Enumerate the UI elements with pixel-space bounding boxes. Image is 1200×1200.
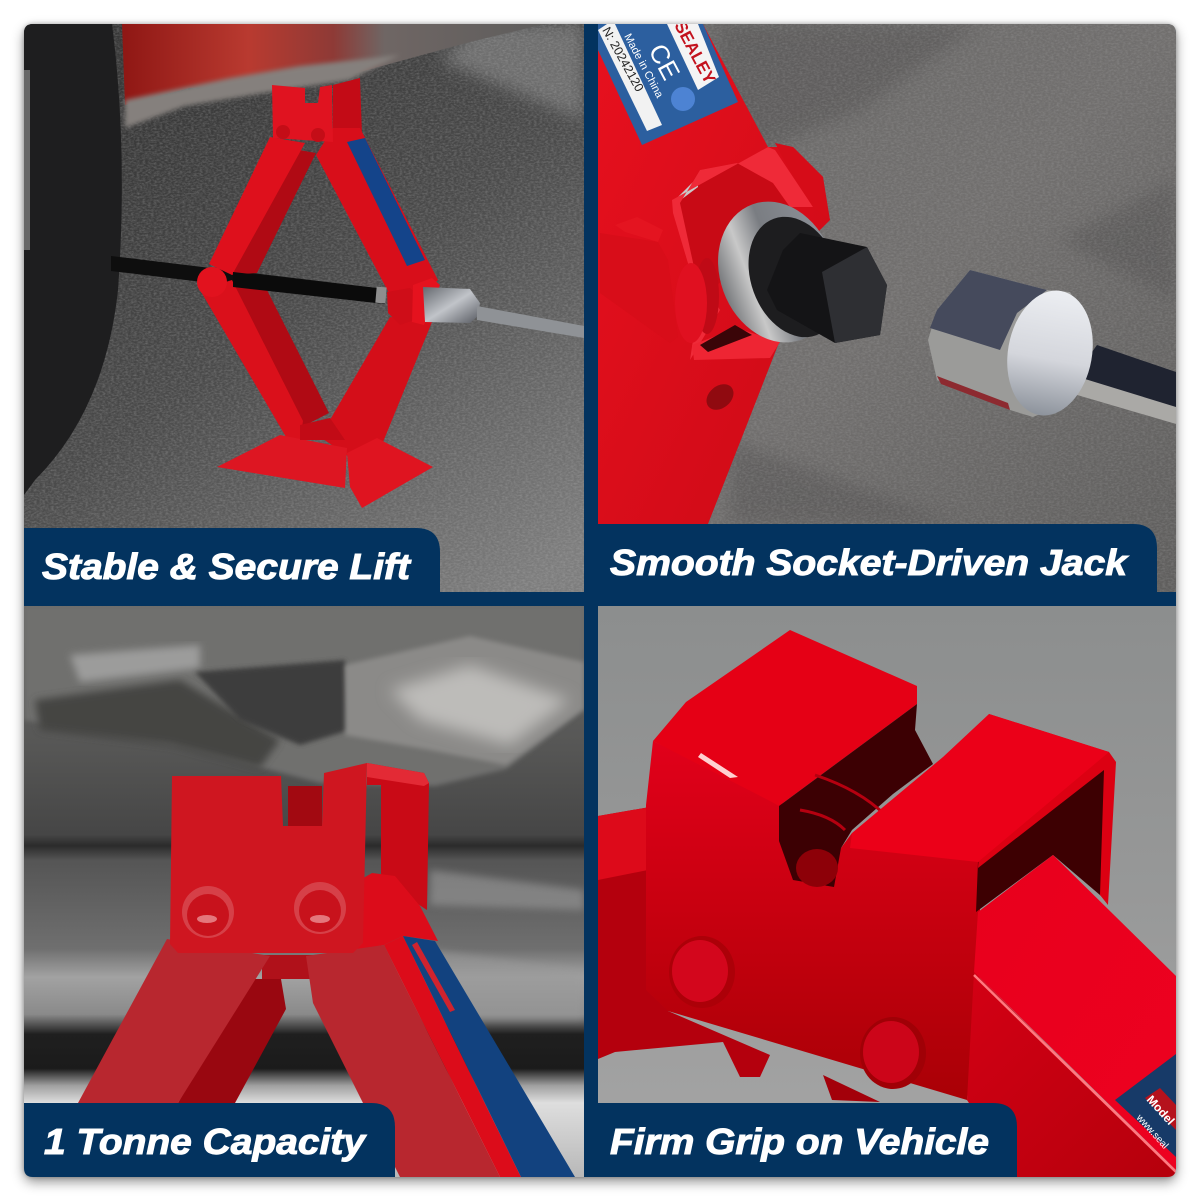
- caption tab: [584, 524, 1176, 606]
- plate lug: [615, 217, 663, 242]
- inner arm: [178, 979, 286, 1103]
- second hanging tab: [823, 1075, 880, 1102]
- socket red reflection: [937, 376, 1010, 410]
- concrete floor: [24, 24, 584, 592]
- caption text: 1 Tonne Capacity: [44, 1121, 367, 1162]
- silver slit: [678, 177, 698, 199]
- caption text: Firm Grip on Vehicle: [610, 1121, 989, 1162]
- caption: 1 tonne capacity: [24, 1103, 395, 1177]
- lower right jack arm: [320, 317, 432, 462]
- serial text: N: 20242120: [599, 25, 646, 94]
- lower lip: [692, 328, 780, 360]
- far light bands: [430, 870, 584, 1020]
- rivet cap: [672, 940, 728, 1002]
- caption text: Smooth Socket-Driven Jack: [610, 542, 1129, 583]
- saddle plate: [170, 763, 367, 953]
- tyre: [24, 24, 122, 495]
- side lug: [775, 143, 830, 220]
- chassis underside: [24, 606, 584, 786]
- right arm bright strip: [384, 936, 521, 1177]
- label url: www.seal: [1133, 1112, 1170, 1151]
- bracket strap: [672, 147, 813, 360]
- serial number strip: [598, 24, 662, 131]
- saddle highlight: [698, 753, 738, 778]
- made in china text: Made in China: [621, 32, 666, 101]
- rivet highlight: [310, 915, 330, 923]
- upper left jack arm: [209, 137, 305, 275]
- hex bolt: [767, 233, 887, 343]
- opening shadow: [700, 325, 752, 352]
- panel: stable and secure lift photo: [24, 24, 584, 592]
- left joint: [197, 267, 227, 293]
- label red band: [1145, 1088, 1176, 1130]
- right joint: [387, 288, 413, 320]
- left plate: [600, 233, 678, 343]
- rivet base: [299, 890, 341, 932]
- rivet cap: [863, 1021, 919, 1083]
- jack foot: [347, 438, 433, 508]
- lower tube side face: [967, 972, 1176, 1177]
- lower left jack arm: [200, 280, 303, 440]
- bracket inner: [678, 163, 795, 300]
- left arm: [78, 939, 270, 1103]
- rivet base: [187, 894, 229, 936]
- right rim: [978, 714, 1116, 905]
- data label: [598, 24, 738, 145]
- label corner: [1115, 1054, 1176, 1157]
- threaded screw: [111, 256, 385, 304]
- wrench rod: [1067, 345, 1176, 424]
- socket end face: [998, 284, 1102, 422]
- right saddle rivet: [311, 128, 325, 142]
- right arm upper: [355, 873, 438, 950]
- lower left inner arm: [236, 287, 329, 424]
- floor texture: [24, 24, 584, 592]
- label red strip: [412, 942, 455, 1012]
- right arm textured face: [306, 945, 500, 1177]
- label text: Model: [1144, 1093, 1177, 1128]
- CE mark: CE: [643, 39, 686, 85]
- garage background: [24, 606, 584, 1177]
- front pin: [675, 263, 707, 343]
- chassis light strip: [70, 645, 200, 682]
- slot pin: [796, 849, 838, 887]
- socket: [423, 287, 480, 323]
- right top face: [850, 714, 1109, 862]
- lower tube top face: [974, 855, 1176, 1170]
- hex bolt face: [822, 247, 887, 343]
- caption: smooth socket-driven jack: [584, 524, 1176, 606]
- caption: stable and secure lift: [24, 528, 584, 606]
- caption: firm grip on vehicle: [584, 1103, 1017, 1177]
- wrench rod: [477, 306, 584, 338]
- left slot: [779, 704, 933, 887]
- left bar top: [598, 807, 650, 880]
- front plate: [646, 741, 980, 1100]
- tube ridge highlight: [974, 975, 1176, 1172]
- car sill: [122, 24, 545, 105]
- rivet recess: [669, 936, 735, 1008]
- floor texture: [706, 24, 1176, 592]
- divider: vertical navy bar: [584, 24, 598, 1177]
- chassis dark lower left: [35, 680, 280, 768]
- panel: 1 tonne capacity photo: [24, 606, 584, 1177]
- collar: [699, 185, 855, 359]
- grey wall: [598, 606, 1176, 1177]
- saddle slot: [288, 786, 322, 826]
- collar inner ring: [732, 204, 858, 350]
- blurred floor: [703, 24, 1176, 592]
- panel: smooth socket-driven jack photo: [598, 18, 1176, 592]
- bracket top edge: [367, 763, 429, 786]
- rear bracket: [367, 763, 429, 910]
- rivet halo: [182, 886, 234, 938]
- tyre rim highlight: [24, 70, 30, 250]
- socket dark top: [930, 270, 1047, 350]
- safety icon: [671, 87, 695, 111]
- rear saddle plate: [333, 78, 362, 132]
- panel: firm grip on vehicle photo: [598, 606, 1177, 1177]
- rear pin: [695, 258, 719, 334]
- screw end: [375, 287, 387, 303]
- caption text: Stable & Secure Lift: [42, 546, 412, 587]
- upper right jack arm: [316, 128, 438, 295]
- caption tab: [24, 1103, 395, 1177]
- brand badge: [667, 24, 719, 90]
- loose socket body: [928, 270, 1092, 417]
- arm label: [403, 936, 575, 1177]
- jack centre: [300, 418, 345, 440]
- floor dark patches: [720, 24, 1176, 524]
- left saddle rivet: [276, 125, 290, 139]
- jack label: [347, 138, 425, 266]
- left rivet: [182, 886, 234, 938]
- chassis dark lump: [195, 660, 350, 745]
- chassis metal surface: [345, 636, 584, 765]
- right rivet: [294, 882, 346, 934]
- right slot: [976, 762, 1108, 912]
- jack body: [598, 24, 830, 524]
- rivet highlight: [197, 915, 217, 923]
- caption tab: [584, 1103, 1017, 1177]
- slot rings: [800, 775, 885, 830]
- right rivet: [860, 1017, 926, 1089]
- bright metal: [390, 665, 570, 745]
- rivet recess: [860, 1017, 926, 1089]
- wrench rod light edge: [1067, 375, 1176, 424]
- caption tab: [24, 528, 584, 606]
- rivet halo: [294, 882, 346, 934]
- far floor light patch: [440, 24, 584, 120]
- jack base: [217, 435, 347, 488]
- sill underside: [125, 55, 400, 128]
- screw over arm: [233, 272, 385, 304]
- side hole: [701, 379, 739, 415]
- cross bar: [262, 955, 317, 979]
- left bar: [598, 807, 770, 1077]
- left rivet: [669, 936, 735, 1008]
- left top face: [653, 630, 917, 806]
- upper left inner arm: [232, 148, 316, 275]
- brand text: SEALEY: [670, 18, 719, 88]
- jack saddle: [272, 85, 333, 142]
- right joint lug: [412, 278, 440, 325]
